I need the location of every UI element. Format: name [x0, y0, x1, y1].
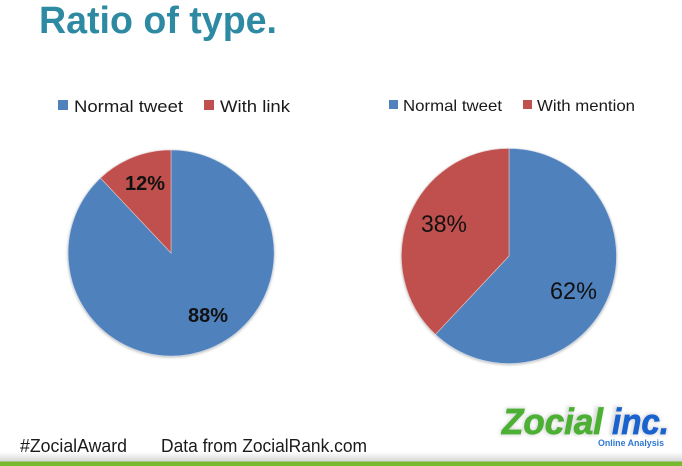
- legend: left pie: With link: [220, 97, 291, 116]
- legend: right pie: [389, 98, 635, 115]
- legend: right pie: With mention: [537, 98, 635, 115]
- logo: Zocial inc.: Online Analysis: [598, 438, 664, 448]
- legend: right pie: Normal tweet: [403, 98, 503, 115]
- slice: with mention 38%: [401, 148, 509, 334]
- label: 62%: 62%: [550, 278, 597, 305]
- legend: left pie: Normal tweet: [74, 97, 183, 116]
- label: 38%: 38%: [421, 211, 467, 238]
- legend: left pie: [58, 97, 291, 116]
- slice: normal tweet 62%: [435, 148, 616, 363]
- label: 12%: 12%: [125, 173, 165, 195]
- slice: with link 12%: [100, 150, 171, 253]
- label: 88%: 88%: [188, 305, 228, 327]
- logo: Zocial inc.: Zocial inc.: [501, 401, 669, 442]
- pie chart: mention ratio: [401, 148, 617, 365]
- title: Ratio of type.: [39, 0, 277, 42]
- footer source: Data from ZocialRank.com: [161, 436, 367, 456]
- pie chart: link ratio: [68, 150, 274, 358]
- slice: normal tweet 88%: [68, 150, 274, 356]
- footer hashtag: #ZocialAward: [20, 436, 127, 456]
- logo: Zocial inc.: Zocial: [501, 401, 604, 442]
- footer band: [0, 452, 682, 466]
- logo: Zocial inc.: inc.: [612, 401, 669, 442]
